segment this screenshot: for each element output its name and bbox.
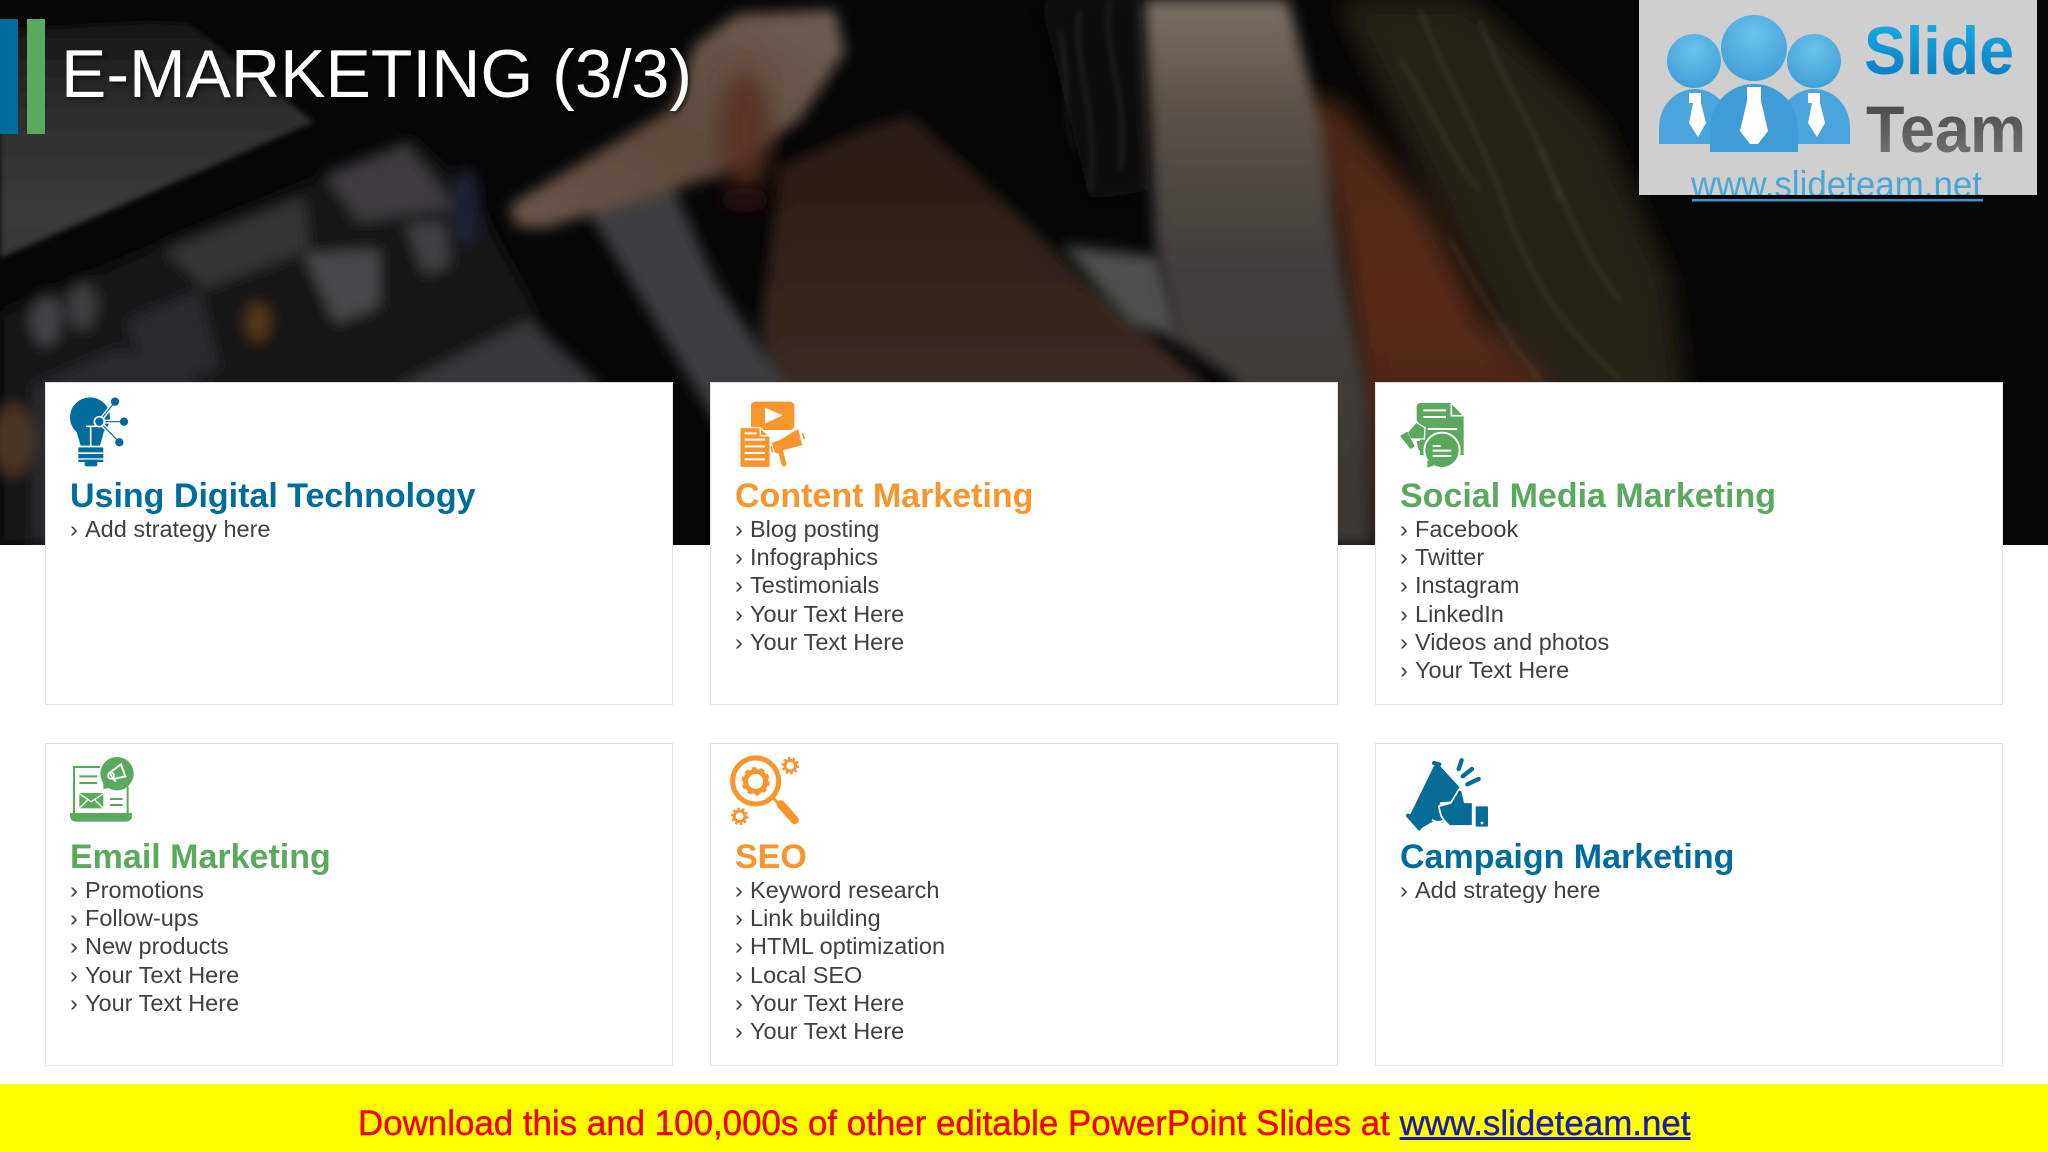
panel: social media marketing bbox=[1375, 382, 2003, 705]
icon: email laptop megaphone bbox=[70, 757, 134, 822]
logo: SlideTeam: www.slideteam.net bbox=[1690, 164, 1983, 205]
list: social media marketing: Twitter bbox=[1415, 544, 1484, 570]
list: email marketing: Follow-ups bbox=[85, 905, 199, 931]
icon: social document chat bbox=[1400, 403, 1464, 468]
list: using digital technology: Add strategy here bbox=[85, 516, 270, 542]
heading: seo: SEO bbox=[735, 838, 807, 876]
list: seo: › bbox=[735, 962, 743, 988]
panel: email marketing bbox=[45, 743, 673, 1066]
list: social media marketing: Videos and photos bbox=[1415, 629, 1609, 655]
footer banner bbox=[0, 1084, 2048, 1152]
list: email marketing: Promotions bbox=[85, 877, 204, 903]
hair and strip bbox=[1062, 245, 1185, 340]
icon: campaign megaphone thumbs-up bbox=[1406, 758, 1488, 830]
heading: content marketing: Content Marketing bbox=[735, 477, 1033, 515]
list: content marketing: › bbox=[735, 629, 743, 655]
heading: social media marketing: Social Media Marketing bbox=[1400, 477, 1776, 515]
list: seo: › bbox=[735, 905, 743, 931]
list: seo bbox=[735, 877, 945, 1044]
icon: video document megaphone bbox=[740, 402, 806, 467]
list: social media marketing: › bbox=[1400, 601, 1408, 627]
list: seo: Local SEO bbox=[750, 962, 862, 988]
list: social media marketing: › bbox=[1400, 629, 1408, 655]
panel: using digital technology bbox=[45, 382, 673, 705]
panel: seo bbox=[710, 743, 1338, 1066]
tablet bezel bbox=[0, 22, 314, 258]
list: seo: › bbox=[735, 877, 743, 903]
list: seo: › bbox=[735, 933, 743, 959]
hero background photo bbox=[0, 0, 2048, 545]
list: social media marketing bbox=[1400, 516, 1609, 683]
logo: SlideTeam bbox=[1639, 0, 2037, 202]
title: E-MARKETING (3/3) bbox=[61, 36, 692, 112]
list: social media marketing: › bbox=[1400, 657, 1408, 683]
list: content marketing: › bbox=[735, 544, 743, 570]
list: content marketing: › bbox=[735, 516, 743, 542]
list: content marketing: Your Text Here bbox=[750, 629, 904, 655]
title accent bars bbox=[0, 19, 45, 134]
list: social media marketing: › bbox=[1400, 544, 1408, 570]
list: email marketing: Your Text Here bbox=[85, 990, 239, 1016]
list: using digital technology: › bbox=[70, 516, 78, 542]
list: seo: › bbox=[735, 990, 743, 1016]
footer text: Download this and 100,000s of other editable PowerPoint Slides at www.slideteam.net bbox=[358, 1104, 1690, 1143]
list: email marketing: › bbox=[70, 877, 78, 903]
list: email marketing: › bbox=[70, 990, 78, 1016]
logo: SlideTeam: Team bbox=[1866, 92, 2026, 166]
list: social media marketing: Instagram bbox=[1415, 572, 1520, 598]
list: email marketing: New products bbox=[85, 933, 229, 959]
list: social media marketing: Facebook bbox=[1415, 516, 1518, 542]
list: social media marketing: › bbox=[1400, 572, 1408, 598]
panel: content marketing bbox=[710, 382, 1338, 705]
list: email marketing: › bbox=[70, 905, 78, 931]
list: content marketing: › bbox=[735, 601, 743, 627]
list: social media marketing: Your Text Here bbox=[1415, 657, 1569, 683]
list: seo: Keyword research bbox=[750, 877, 939, 903]
list: content marketing: Testimonials bbox=[750, 572, 879, 598]
heading: email marketing: Email Marketing bbox=[70, 838, 331, 876]
panel: campaign marketing bbox=[1375, 743, 2003, 1066]
icon: seo magnifier gears bbox=[730, 756, 800, 826]
list: seo: Your Text Here bbox=[750, 1018, 904, 1044]
list: content marketing: Infographics bbox=[750, 544, 878, 570]
list: content marketing bbox=[735, 516, 904, 655]
hand bbox=[510, 10, 1260, 545]
list: email marketing: Your Text Here bbox=[85, 962, 239, 988]
list: content marketing: Blog posting bbox=[750, 516, 879, 542]
list: email marketing: › bbox=[70, 962, 78, 988]
list: social media marketing: › bbox=[1400, 516, 1408, 542]
tablet screen bbox=[0, 139, 620, 545]
list: email marketing: › bbox=[70, 933, 78, 959]
list: seo: HTML optimization bbox=[750, 933, 945, 959]
list: campaign marketing: › bbox=[1400, 877, 1408, 903]
icon: light bulb network bbox=[70, 397, 128, 466]
list: seo: Your Text Here bbox=[750, 990, 904, 1016]
logo: SlideTeam: Slide bbox=[1864, 13, 2014, 89]
list: seo: › bbox=[735, 1018, 743, 1044]
list: campaign marketing: Add strategy here bbox=[1415, 877, 1600, 903]
list: social media marketing: LinkedIn bbox=[1415, 601, 1504, 627]
heading: using digital technology: Using Digital Technology bbox=[70, 477, 476, 515]
heading: campaign marketing: Campaign Marketing bbox=[1400, 838, 1734, 876]
list: content marketing: Your Text Here bbox=[750, 601, 904, 627]
list: content marketing: › bbox=[735, 572, 743, 598]
list: email marketing bbox=[70, 877, 239, 1016]
list: seo: Link building bbox=[750, 905, 881, 931]
